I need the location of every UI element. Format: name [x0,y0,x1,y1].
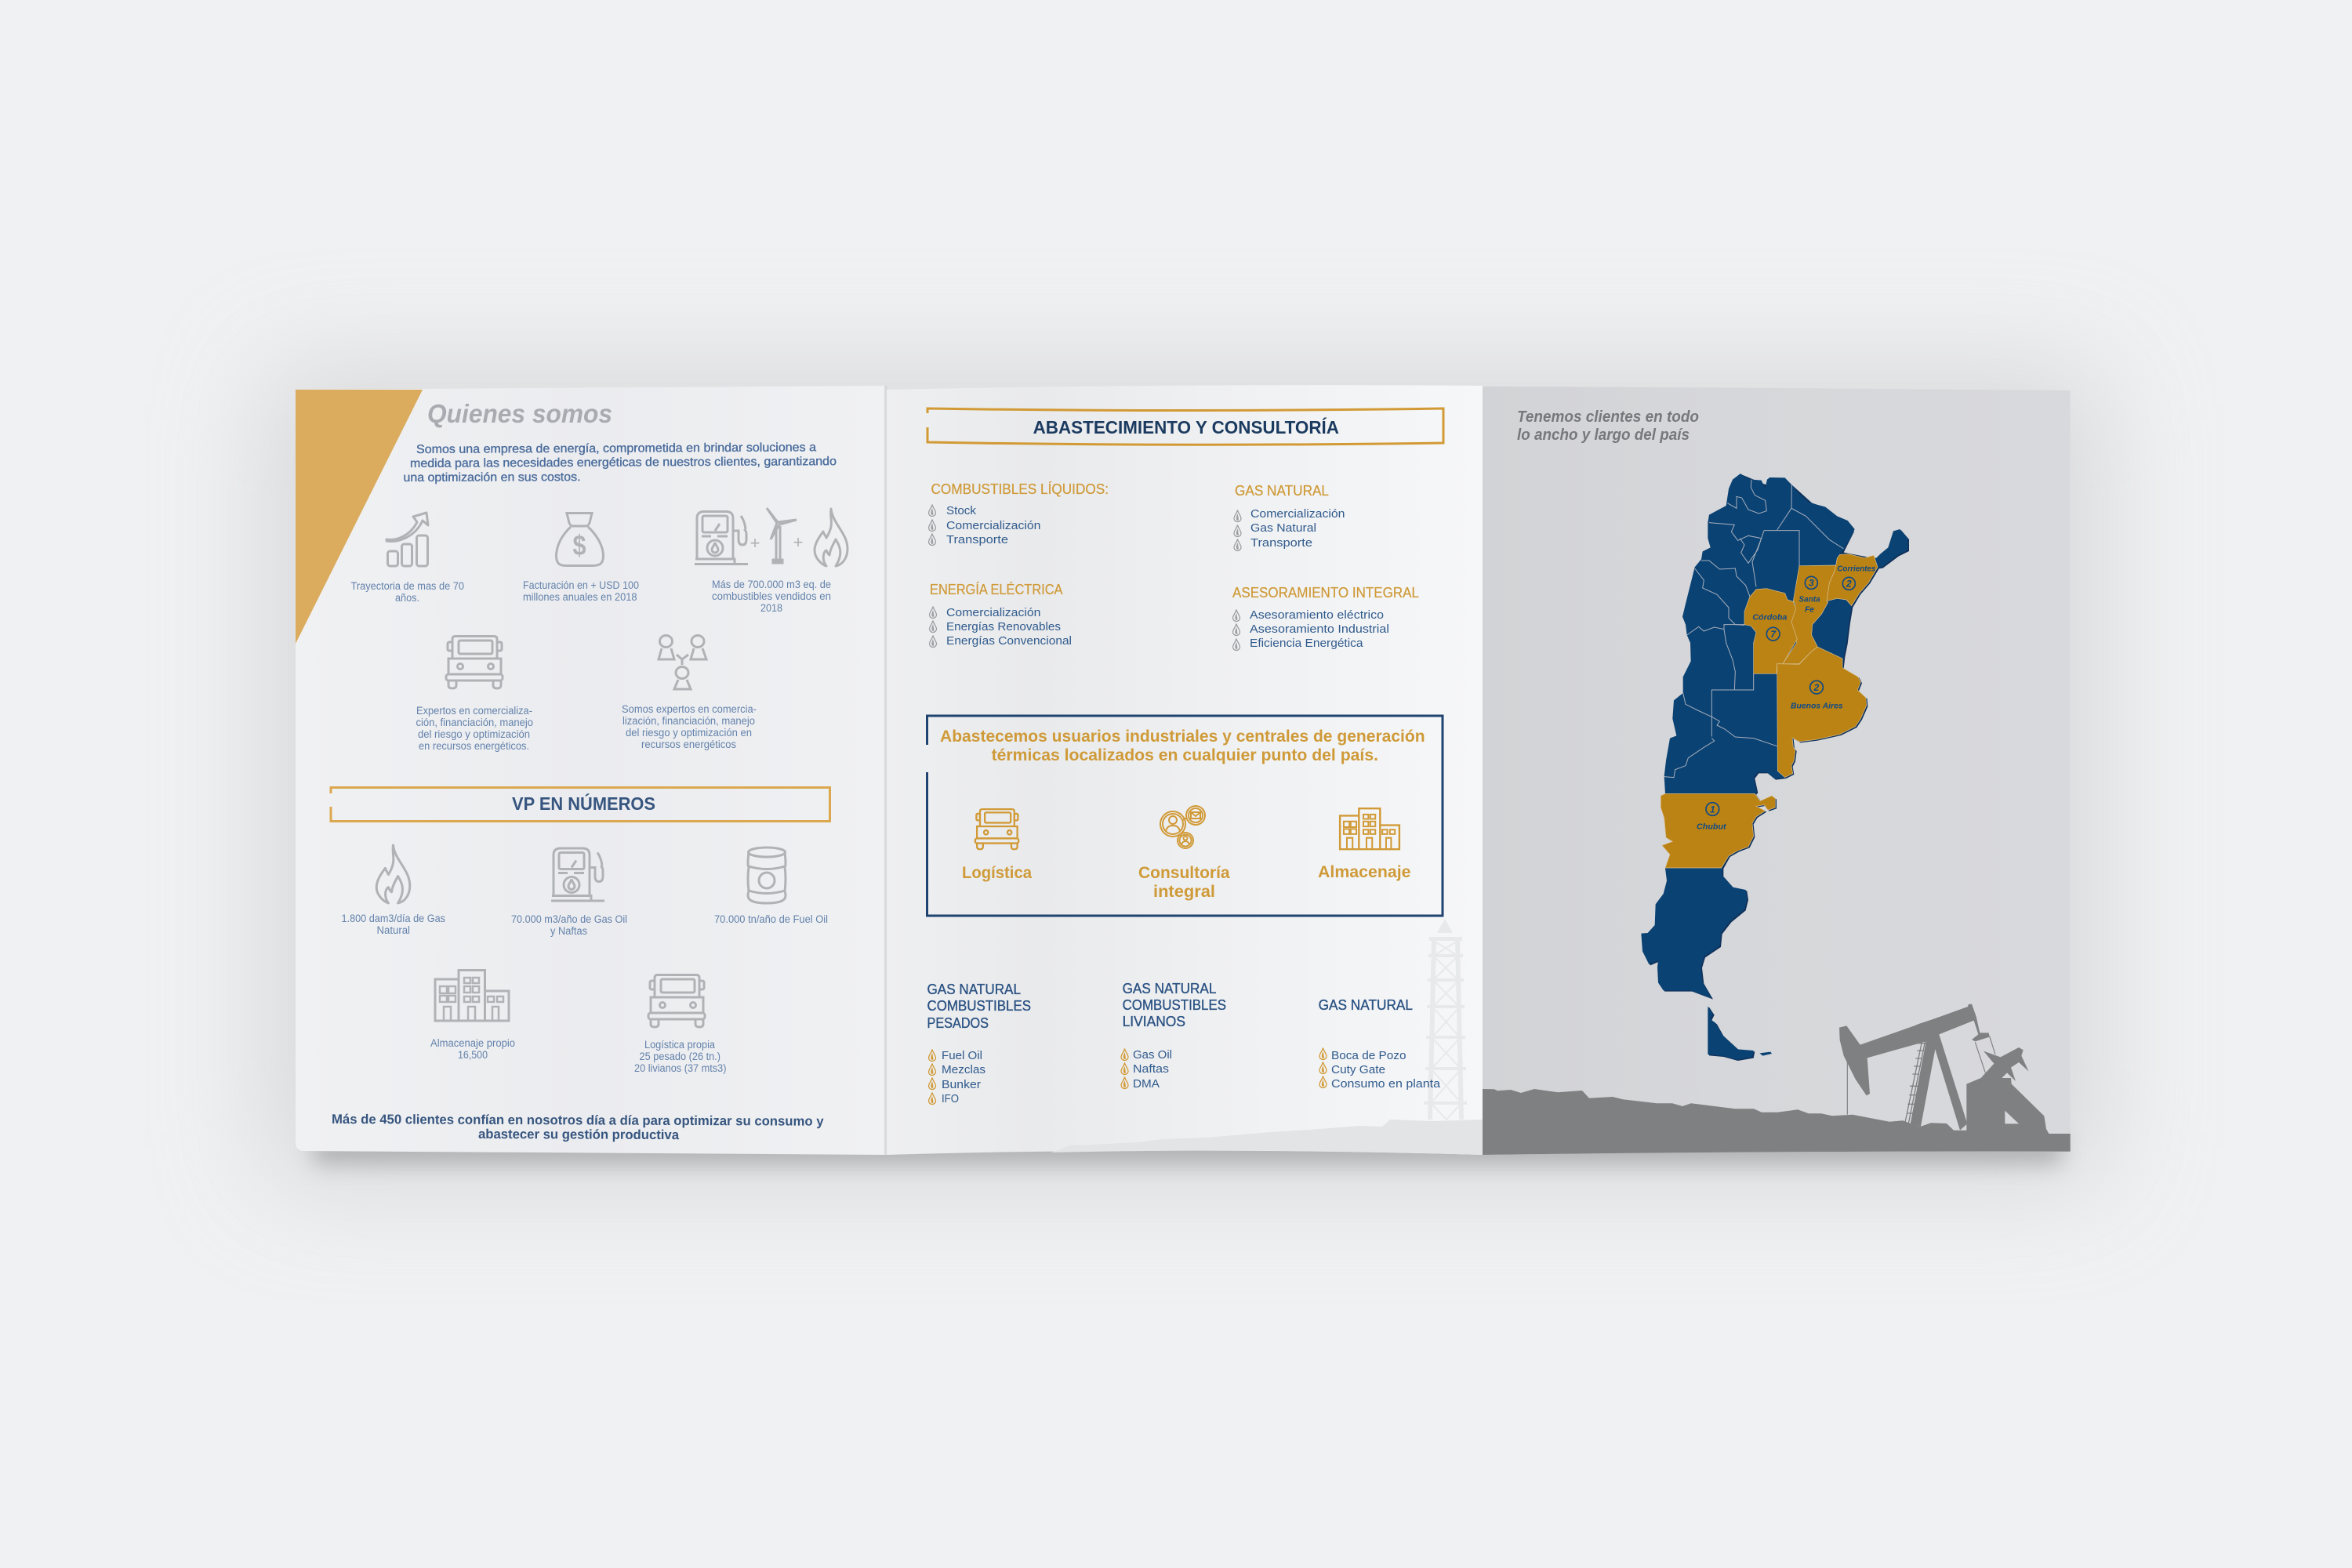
panel: middle page [887,385,1483,1155]
icon: growth chart [387,513,428,566]
province: Santa Fe: Fe [1805,606,1814,615]
icon: fuel pump, wind turbine and flame [695,508,848,566]
title: Quienes somos: Quienes somos [427,399,612,428]
list: combustibles livianos: GAS NATURAL [1123,981,1216,996]
tagline: lo ancho y largo del país [1517,426,1690,444]
icon: flame [376,845,410,903]
province: Santa Fe: Santa [1798,595,1820,604]
list: combustibles liquidos: Stock [946,504,977,517]
list: combustibles pesados: Bunker [942,1078,981,1091]
list: gas natural products: Cuty Gate [1331,1063,1385,1076]
caption: facturacion: Facturación en + USD 100 [523,579,639,591]
list: combustibles pesados: Fuel Oil [942,1049,982,1062]
province: Corrientes: 2 [1846,579,1852,590]
list: gas natural products: Consumo en planta [1331,1077,1441,1091]
icon: money bag [557,513,604,566]
ambient book shadow [267,368,2101,1184]
icon: people network [659,635,706,689]
list: gas natural products [1319,997,1441,1091]
caption: 700.000 m3 [712,579,831,614]
caption: somos expertos: lización, financiación, manejo [622,715,755,727]
icon: fuel pump, wind turbine and flame: + [793,532,803,552]
map coast shadow [1644,474,1909,1061]
province: Santa Fe: 3 [1809,578,1814,589]
list: asesoramiento integral: Asesoramiento Industrial [1250,622,1389,636]
icon: fuel pump [551,848,604,901]
province borders [1664,480,1844,778]
list: asesoramiento integral [1232,585,1419,651]
heading box: VP en numeros: VP EN NÚMEROS [512,793,655,814]
list: combustibles pesados: COMBUSTIBLES [927,998,1031,1014]
caption: almacenaje propio [430,1037,515,1061]
icon: fuel pump, wind turbine and flame: + [750,533,760,553]
tagline [1517,408,1699,444]
panel: left page [296,386,884,1155]
caption: expertos: Expertos en comercializa- [416,705,532,717]
list: energia electrica: Energías Convencional [946,634,1072,648]
list: combustibles pesados: GAS NATURAL [927,982,1021,997]
list: energia electrica [930,582,1072,648]
icon: truck [648,975,705,1027]
closing statement: Más de 450 clientes confían en nosotros día a día para optimizar su consumo y [332,1112,824,1129]
province: Cordoba [1744,589,1797,673]
list: energia electrica: Energías Renovables [946,620,1061,633]
caption: fuel oil: 70.000 tn/año de Fuel Oil [714,913,828,925]
province: Buenos Aires: Buenos Aires [1791,702,1843,710]
icon: gold truck [975,809,1018,849]
province: Chubut: Chubut [1697,823,1726,832]
icon: truck [446,637,503,688]
heading box: abastecimiento y consultoria [927,408,1443,445]
panel: services box [927,716,1443,916]
map of Argentina [1641,474,1909,1061]
heading box: VP en numeros [331,787,829,822]
province: Buenos Aires [1777,647,1867,778]
intro paragraph: Somos una empresa de energía, comprometida en brindar soluciones a [416,441,816,456]
list: combustibles livianos [1121,981,1226,1091]
province: Buenos Aires: 2 [1813,682,1820,693]
province: Cordoba: 7 [1770,629,1777,640]
caption: trayectoria [351,580,464,604]
list: gas natural [1234,483,1345,550]
caption: facturacion [523,579,639,603]
list: combustibles livianos: Naftas [1133,1062,1169,1076]
caption: trayectoria: años. [395,592,419,604]
caption: somos expertos: Somos expertos en comercia- [622,703,757,715]
caption: gas natural: 1.800 dam3/día de Gas [342,913,445,924]
list: combustibles pesados: PESADOS [927,1015,989,1031]
map landmass [1641,474,1907,1060]
gold corner triangle [296,390,423,644]
intro paragraph: una optimización en sus costos. [403,470,581,485]
list: combustibles livianos: COMBUSTIBLES [1123,997,1226,1013]
caption: expertos: ción, financiación, manejo [416,717,533,728]
caption: gas oil y naftas: y Naftas [550,925,587,937]
caption: almacenaje propio: 16,500 [458,1049,488,1061]
province: Santa Fe [1783,565,1836,664]
list: combustibles livianos: LIVIANOS [1123,1014,1185,1029]
list: combustibles livianos: Gas Oil [1133,1048,1172,1062]
closing statement: abastecer su gestión productiva [478,1127,680,1142]
caption: expertos: en recursos energéticos. [419,740,529,752]
list: asesoramiento integral: ASESORAMIENTO INTEGRAL [1232,585,1419,601]
list: combustibles liquidos [928,481,1109,546]
list: combustibles liquidos: COMBUSTIBLES LÍQUIDOS: [931,481,1109,497]
province: Chubut: 1 [1710,804,1715,815]
icon: money bag: $ [572,529,586,561]
caption: expertos: del riesgo y optimización [418,728,530,740]
statement: térmicas localizados en cualquier punto del país. [992,746,1378,764]
list: gas natural: Gas Natural [1250,521,1316,535]
ground silhouette [1483,1089,2071,1155]
list: combustibles pesados: IFO [942,1092,959,1105]
caption: 700.000 m3: combustibles vendidos en [712,590,831,602]
caption: logistica propia: 20 livianos (37 mts3) [634,1062,726,1074]
province: Corrientes: Corrientes [1837,564,1876,573]
gutter fold [884,386,887,1155]
province: Corrientes [1827,554,1878,606]
pump jack silhouette [1839,1004,2049,1134]
caption: logistica propia [634,1039,726,1074]
tagline: Tenemos clientes en todo [1517,408,1699,426]
caption: almacenaje propio: Almacenaje propio [430,1037,515,1049]
caption: somos expertos: del riesgo y optimización en [626,727,752,739]
list: gas natural: Transporte [1250,536,1312,550]
caption: gas oil y naftas: 70.000 m3/año de Gas Oil [511,913,627,925]
statement [940,728,1425,764]
caption: gas oil y naftas [511,913,627,937]
decorative faint derrick tower [1424,919,1467,1120]
list: combustibles pesados [927,982,1031,1105]
label: almacenaje: Almacenaje [1318,863,1411,881]
label: consultoria integral [1138,864,1230,901]
icon: oil barrel [748,848,786,903]
caption: gas natural: Natural [376,924,410,936]
label: consultoria integral: Consultoría [1138,864,1230,882]
province: Chubut [1661,793,1775,868]
list: gas natural products: GAS NATURAL [1319,997,1413,1013]
label: logistica: Logística [962,864,1032,882]
heading box: abastecimiento y consultoria: ABASTECIMIENTO Y CONSULTORÍA [1033,416,1339,437]
list: asesoramiento integral: Eficiencia Energética [1250,637,1363,650]
panel: map page [1483,387,2071,1155]
list: combustibles liquidos: Transporte [946,533,1008,546]
icon: consulting network [1160,806,1205,848]
icon: storage buildings [435,971,509,1021]
list: gas natural: Comercialización [1250,507,1345,521]
caption: gas natural [342,913,445,936]
caption: trayectoria: Trayectoria de mas de 70 [351,580,464,592]
list: combustibles pesados: Mezclas [942,1063,985,1076]
caption: facturacion: millones anuales en 2018 [523,591,637,603]
caption: logistica propia: 25 pesado (26 tn.) [640,1051,720,1062]
intro paragraph: medida para las necesidades energéticas de nuestros clientes, garantizando [410,455,837,470]
caption: somos expertos [622,703,757,750]
list: energia electrica: ENERGÍA ELÉCTRICA [930,582,1063,597]
caption: 700.000 m3: Más de 700.000 m3 eq. de [712,579,831,590]
list: combustibles livianos: DMA [1133,1077,1160,1091]
list: combustibles liquidos: Comercialización [946,519,1041,532]
intro paragraph [403,441,837,485]
icon: gold buildings [1340,808,1399,849]
closing statement [332,1112,824,1142]
decorative faint ground [1051,1120,1483,1155]
list: gas natural products: Boca de Pozo [1331,1049,1406,1062]
province: Cordoba: Córdoba [1752,613,1788,622]
caption: expertos [416,705,533,752]
caption: somos expertos: recursos energéticos [641,739,736,750]
statement: Abastecemos usuarios industriales y centrales de generación [940,728,1425,746]
label: consultoria integral: integral [1153,883,1215,901]
caption: 700.000 m3: 2018 [760,602,782,614]
list: gas natural: GAS NATURAL [1235,483,1329,499]
contact shadow under book [314,1133,2062,1164]
list: asesoramiento integral: Asesoramiento eléctrico [1250,608,1384,622]
caption: logistica propia: Logística propia [644,1039,715,1051]
list: energia electrica: Comercialización [946,606,1041,619]
